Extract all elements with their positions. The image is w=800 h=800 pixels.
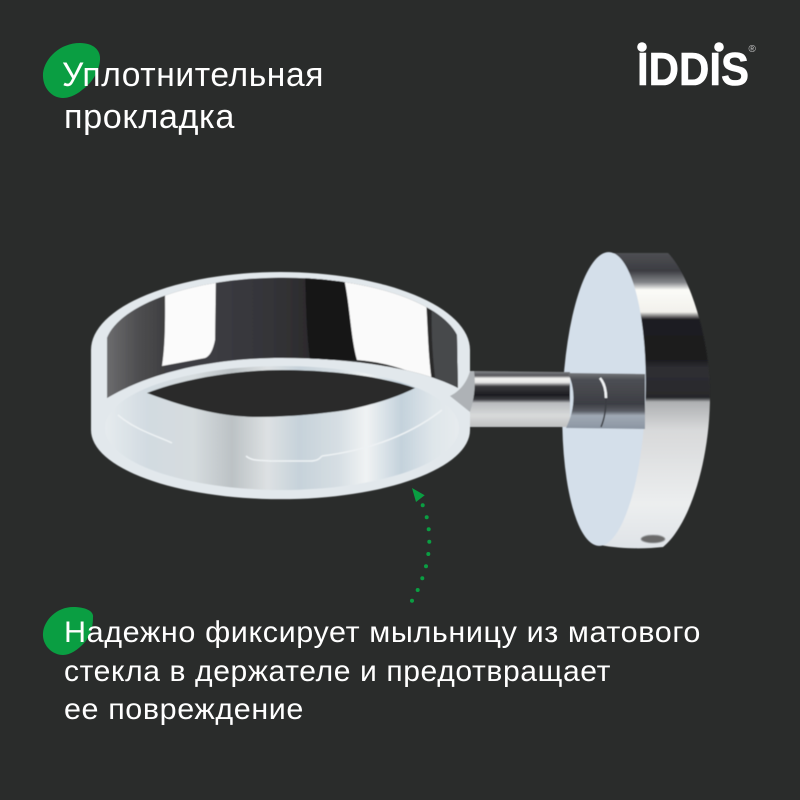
- logo: iddis: IDDIS: [637, 43, 749, 95]
- collar groove highlight: [600, 378, 606, 398]
- description text: стекла в держателе и предотвращает: [64, 655, 611, 688]
- ring silhouette: [91, 272, 470, 499]
- logo: iddis: ®: [748, 44, 756, 55]
- description text: ее повреждение: [64, 693, 304, 726]
- stem collar: [566, 373, 645, 429]
- connecting stem: [466, 371, 570, 427]
- heading: прокладка: [64, 98, 235, 136]
- green accent blob: heading: [43, 43, 100, 98]
- heading: [62, 56, 324, 136]
- collar groove lower: [601, 398, 606, 427]
- green accent blob: description: [43, 607, 93, 655]
- ring opening: [147, 370, 415, 417]
- description text: Надежно фиксирует мыльницу из матового: [64, 616, 701, 649]
- wall plate face: [557, 251, 651, 547]
- description text: [64, 616, 701, 726]
- ring lower groove: [118, 410, 442, 461]
- chrome band: [106, 277, 458, 398]
- dotted arrow pointing to gasket: [410, 488, 431, 603]
- mounting screw hole: [641, 535, 665, 543]
- inner wall of ring: [105, 366, 459, 490]
- infographic canvas: [42, 42, 756, 725]
- stem joint to ring: [450, 371, 475, 412]
- product: chrome holder: [91, 251, 710, 548]
- wall plate side: [600, 253, 710, 548]
- heading: Уплотнительная: [62, 56, 324, 94]
